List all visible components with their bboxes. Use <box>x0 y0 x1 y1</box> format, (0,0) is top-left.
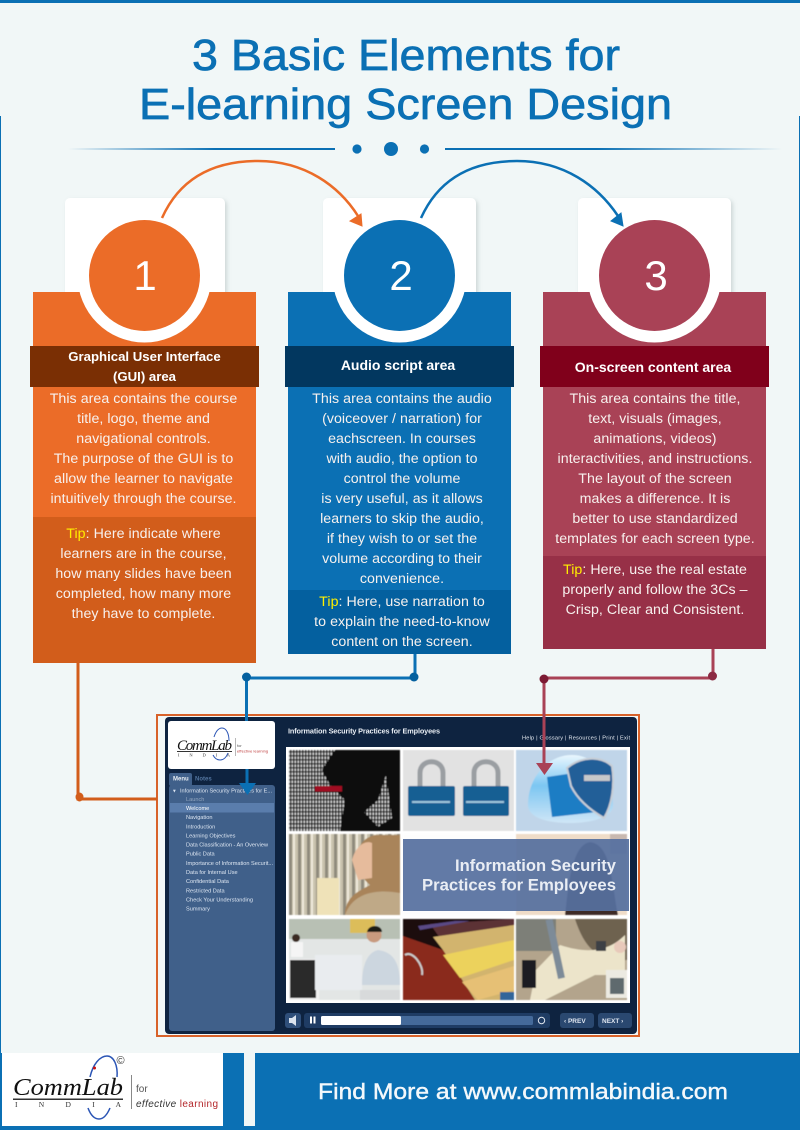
tip text 3: properly and follow the 3Cs – <box>562 582 748 598</box>
body text 1: intuitively through the course. <box>50 491 237 507</box>
tip text 1 <box>55 526 232 622</box>
body text 3: This area contains the title, <box>570 391 740 407</box>
banner: course title: Information Security <box>455 857 617 875</box>
menu panel: Summary <box>186 907 210 913</box>
tip text 2 <box>314 594 491 650</box>
header band 3 <box>540 346 769 387</box>
banner: course title <box>403 839 629 911</box>
connector: step 3 to player content <box>536 649 717 775</box>
title divider <box>68 142 782 156</box>
footer logo: © <box>116 1055 125 1067</box>
footer background <box>0 1053 800 1130</box>
number badge 2 <box>332 208 466 342</box>
body text 3: The layout of the screen <box>578 471 732 487</box>
header band 3: On-screen content area <box>575 359 731 375</box>
image collage <box>286 747 630 1003</box>
audio controls bar: NEXT › <box>602 1018 623 1025</box>
body text 1 <box>50 391 237 507</box>
menu panel: Restricted Data <box>186 888 225 894</box>
body text 3: animations, videos) <box>593 431 717 447</box>
menu panel: Information Security Practices for E... <box>180 788 272 794</box>
body text 2: eachscreen. In courses <box>328 431 476 447</box>
panel: step 1 graphical user interface <box>30 198 259 663</box>
image: file drawer <box>403 919 514 1000</box>
body text 2: if they wish to or set the <box>327 531 477 547</box>
title <box>139 31 672 129</box>
arrow: step 1 to step 2 <box>162 161 362 226</box>
body text 1: navigational controls. <box>76 431 211 447</box>
panel: step 3 on-screen content <box>540 198 769 649</box>
panel: step 2 audio script <box>285 198 514 654</box>
image: woman with files <box>289 834 400 915</box>
menu tabs <box>169 773 212 786</box>
menu tabs: Menu <box>173 776 189 782</box>
body text 2: learners to skip the audio, <box>320 511 484 527</box>
menu panel: Importance of Information Securit... <box>186 861 273 867</box>
player background <box>165 717 637 1034</box>
menu panel: Navigation <box>186 815 212 821</box>
footer logo: CommLab <box>13 1075 123 1101</box>
tip text 1: they have to complete. <box>72 606 215 622</box>
tip text 2: content on the screen. <box>331 634 473 650</box>
player frame <box>157 715 639 1036</box>
image: office from above <box>516 919 627 1000</box>
menu panel: Data Classification - An Overview <box>186 843 269 849</box>
menu panel: ▾ <box>173 788 176 794</box>
header band 1: Graphical User Interface <box>68 349 221 364</box>
body text 1: This area contains the course <box>50 391 237 407</box>
tip text 1: completed, how many more <box>56 586 231 602</box>
footer logo: for <box>136 1084 148 1095</box>
body text 2 <box>312 391 492 587</box>
body text 2: convenience. <box>360 571 444 587</box>
body text 3: makes a difference. It is <box>580 491 730 507</box>
top bar <box>0 0 800 3</box>
tip text 2: Tip: Here, use narration to <box>319 594 485 610</box>
header band 1: (GUI) area <box>113 369 177 384</box>
audio controls bar: ‹ PREV <box>564 1018 586 1025</box>
white card 3 <box>578 198 731 308</box>
body text 1: title, logo, theme and <box>77 411 210 427</box>
player title: Information Security Practices for Employees <box>288 726 440 736</box>
body text 3: better to use standardized <box>572 511 738 527</box>
tip background 2 <box>288 590 511 654</box>
image: locks and cards <box>403 750 514 831</box>
connector: step 1 to player interface <box>76 663 157 802</box>
body text 2: volume according to their <box>322 551 482 567</box>
number badge 1: 1 <box>133 252 157 299</box>
panel body 2 <box>288 292 511 590</box>
menu panel: Data for Internal Use <box>186 870 238 876</box>
white card 1 <box>65 198 225 308</box>
tip text 1: learners are in the course, <box>60 546 227 562</box>
body text 2: control the volume <box>344 471 460 487</box>
body text 2: This area contains the audio <box>312 391 492 407</box>
panel body 1 <box>33 292 256 517</box>
white card 2 <box>323 198 476 308</box>
panel body 3 <box>543 292 766 556</box>
body text 3: templates for each screen type. <box>555 531 755 547</box>
menu panel: Confidential Data <box>186 879 230 885</box>
body text 1: allow the learner to navigate <box>54 471 233 487</box>
tip text 3: Crisp, Clear and Consistent. <box>566 602 744 618</box>
tip text 2: to explain the need-to-know <box>314 614 491 630</box>
image: woman behind banner <box>403 834 627 915</box>
menu panel: Launch <box>186 797 204 803</box>
arrow: step 2 to step 3 <box>421 161 623 226</box>
body text 2: (voiceover / narration) for <box>322 411 482 427</box>
body text 3: text, visuals (images, <box>588 411 722 427</box>
tip text 3: Tip: Here, use the real estate <box>563 562 747 578</box>
body text 2: is very useful, as it allows <box>321 491 483 507</box>
menu panel: Welcome <box>186 806 209 812</box>
menu panel: Check Your Understanding <box>186 898 253 904</box>
footer <box>0 1053 800 1130</box>
player top links: Help | Glossary | Resources | Print | Exit <box>522 736 630 742</box>
footer logo <box>2 1053 223 1126</box>
body text 3 <box>555 391 755 547</box>
footer logo: effective learning <box>136 1099 218 1110</box>
tip text 3 <box>562 562 748 618</box>
menu panel: Public Data <box>186 852 215 858</box>
number badge 3 <box>588 208 722 342</box>
tip text 1: Tip: Here indicate where <box>66 526 221 542</box>
title: 3 Basic Elements for <box>192 31 620 80</box>
title: E-learning Screen Design <box>139 80 672 129</box>
image: password <box>289 750 400 831</box>
banner: course title: Practices for Employees <box>422 876 616 894</box>
audio controls bar <box>285 1013 632 1028</box>
number badge 1 <box>78 208 212 342</box>
body text 2: with audio, the option to <box>325 451 478 467</box>
logo card in player: I N D I A <box>178 752 231 758</box>
number badge 3: 3 <box>644 252 668 299</box>
header band 2: Audio script area <box>341 357 455 373</box>
image: office worker <box>289 919 400 1000</box>
menu panel: Learning Objectives <box>186 834 236 840</box>
footer white gap <box>244 1053 255 1126</box>
image: security dome <box>516 750 627 831</box>
body text 3: interactivities, and instructions. <box>558 451 752 467</box>
connector: step 2 to player menu <box>239 654 418 795</box>
header band 1 <box>30 346 259 387</box>
screenshot: course player <box>157 715 639 1036</box>
logo card in player: CommLab <box>177 738 232 754</box>
footer call to action: Find More at www.commlabindia.com <box>318 1079 728 1104</box>
number badge 2: 2 <box>389 252 413 299</box>
tip background 3 <box>543 556 766 649</box>
header band 2 <box>285 346 514 387</box>
logo card in player: effective learning <box>237 750 268 754</box>
menu panel <box>169 785 275 1031</box>
tip background 1 <box>33 517 256 663</box>
logo card in player <box>168 721 275 769</box>
menu panel: Introduction <box>186 824 215 830</box>
logo card in player: for <box>237 743 242 748</box>
tip text 1: how many slides have been <box>55 566 232 582</box>
body text 1: The purpose of the GUI is to <box>54 451 233 467</box>
menu tabs: Notes <box>195 776 212 782</box>
footer logo: I N D I A <box>15 1100 122 1109</box>
